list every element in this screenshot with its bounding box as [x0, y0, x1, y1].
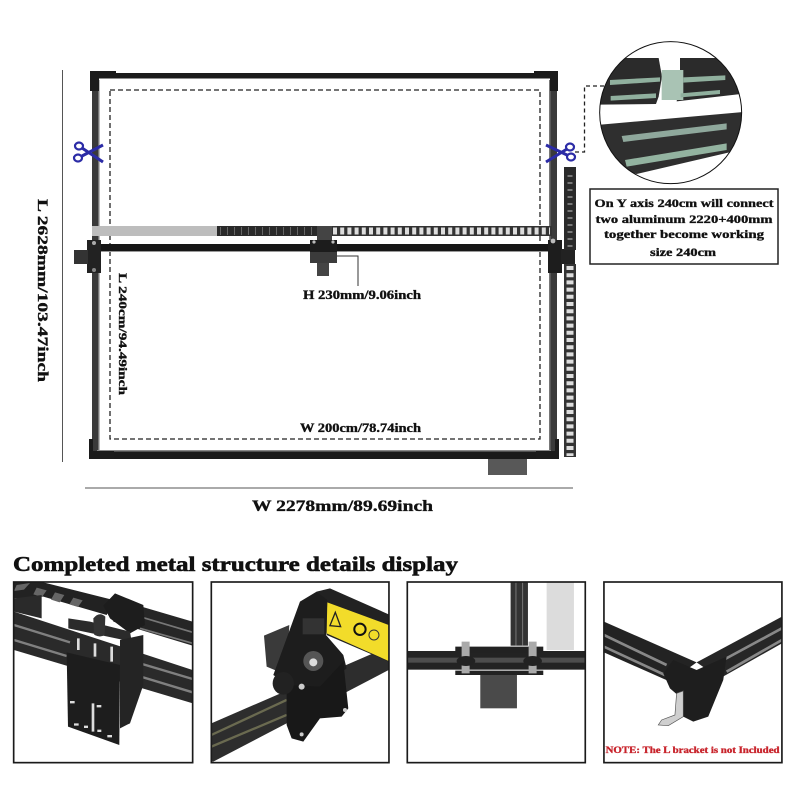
joint lower rail — [597, 112, 747, 174]
frame left rail — [92, 75, 100, 455]
label: height: H 230mm/9.06inch — [303, 288, 421, 302]
photo 2 yellow label rail — [317, 588, 389, 662]
section heading: Completed metal structure details display — [13, 552, 458, 576]
photo 3 vertical rail — [511, 582, 528, 646]
joint centre connector — [662, 70, 683, 100]
photo 4 corner plate — [663, 657, 727, 722]
callout line 2: two aluminum 2220+400mm — [596, 212, 772, 226]
overall length dimension line — [62, 70, 64, 462]
X axis light cable cover — [92, 226, 217, 236]
panel: front carriage photo — [408, 582, 584, 708]
photo panel borders — [14, 582, 782, 763]
callout dashed connector — [575, 86, 604, 152]
frame top rail — [95, 73, 555, 78]
photo 1 back carriage — [120, 635, 143, 728]
callout line 3: together become working — [604, 227, 764, 241]
photo 1 back rail — [113, 607, 192, 646]
icon: left scissors — [74, 142, 103, 162]
panel: corner bracket photo — [604, 617, 782, 754]
panel: wheel plate photo — [211, 582, 389, 763]
frame bottom rail — [90, 450, 558, 459]
label: working width: W 200cm/78.74inch — [300, 421, 421, 435]
photo 3 carriage plates — [455, 647, 543, 675]
photo 2 motor — [264, 625, 289, 675]
X axis dark drag chain — [217, 226, 317, 236]
photo 2 lower plate — [286, 670, 348, 742]
photo 3 motor — [480, 675, 517, 708]
Y axis upper drag chain — [564, 167, 576, 250]
joint upper strips — [610, 75, 725, 101]
photo 3 light cover — [547, 582, 574, 650]
photo panels — [14, 582, 782, 763]
label: overall width: W 2278mm/89.69inch — [252, 498, 433, 515]
photo 2 upper plate — [273, 592, 347, 688]
photo 4 note: NOTE: The L bracket is not Included — [606, 745, 780, 755]
laser carriage — [310, 226, 337, 276]
callout box — [590, 189, 778, 264]
photo 4 right rail — [697, 617, 782, 678]
photo 1 carriage plate — [68, 618, 132, 642]
photo 4 left rail — [604, 622, 697, 682]
joint upper left rail — [597, 58, 662, 105]
photo 1 front rail — [14, 612, 193, 703]
photo 2 lower rail — [211, 647, 389, 762]
label: overall length: L 2628mm/103.47inch — [34, 199, 50, 383]
panel: laser carriage photo — [14, 582, 192, 745]
bottom motor block — [488, 459, 527, 475]
icon: right scissors — [546, 144, 575, 162]
joint lower strips — [622, 123, 727, 142]
label: working length: L 240cm/94.49inch — [116, 273, 130, 395]
photo 1 drag chain — [14, 582, 113, 615]
photo 4 L bracket — [658, 691, 683, 726]
machine frame diagram — [74, 71, 576, 475]
photo 3 horizontal rail — [407, 651, 585, 670]
left gantry carriage — [74, 240, 101, 273]
joint upper right rail — [676, 58, 739, 102]
frame corner brackets — [89, 71, 559, 459]
photo 1 chain support — [14, 595, 42, 618]
Y axis lower drag chain — [564, 264, 576, 457]
X axis open drag chain — [330, 226, 552, 236]
photo 1 top bracket — [103, 593, 145, 633]
X axis gantry beam — [87, 244, 560, 252]
photo 1 mounting plate — [67, 652, 120, 745]
callout line 4: size 240cm — [650, 245, 716, 259]
overall width dimension line — [85, 487, 573, 489]
circular detail: rail joint — [597, 42, 747, 184]
frame right rail — [549, 75, 557, 455]
working area dashed outline — [110, 90, 540, 439]
right gantry carriage and motor — [548, 239, 575, 273]
callout line 1: On Y axis 240cm will connect — [594, 196, 774, 210]
height leader line — [337, 256, 358, 286]
photo 1 knob — [93, 614, 105, 637]
